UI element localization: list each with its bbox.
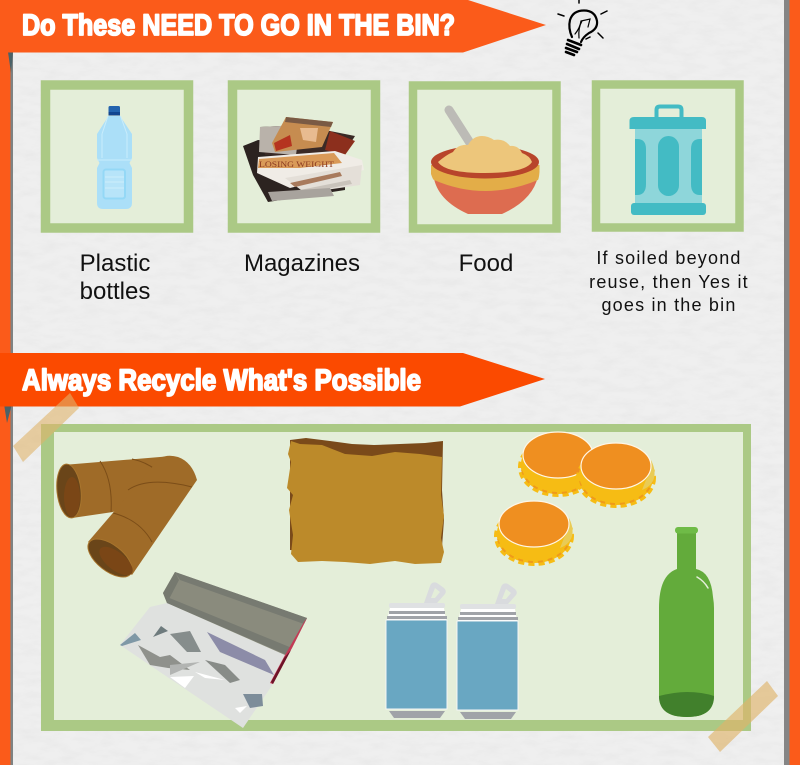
- left edge stripe: [0, 0, 13, 765]
- label: soiled items: reuse, then Yes it: [589, 272, 749, 292]
- tape: top left: [13, 393, 79, 462]
- icon: plastic bottle: [97, 106, 132, 209]
- panel: recyclables: [41, 424, 751, 731]
- panel: plastic bottles: [46, 85, 188, 305]
- panel: soiled items: [589, 84, 749, 315]
- icon: drink cans: [386, 582, 518, 719]
- label: magazines: Magazines: [244, 250, 360, 277]
- icon: magazine stack: [243, 117, 364, 202]
- panel: magazines: [232, 85, 376, 277]
- label: soiled items: goes in the bin: [601, 295, 737, 315]
- label: food: Food: [459, 250, 513, 277]
- icon: light bulb: [558, 0, 607, 55]
- panel: food: [413, 86, 556, 277]
- label: plastic bottles: Plastic: [80, 250, 150, 277]
- heading: always recycle: Always Recycle What's Possible: [22, 364, 421, 397]
- icon: magazine stack: LOSING WEIGHT: [259, 160, 334, 169]
- label: soiled items: If soiled beyond: [596, 248, 742, 268]
- banner: always recycle: [0, 353, 545, 406]
- right edge stripe: [784, 0, 800, 765]
- icon: bottle caps: [497, 432, 655, 563]
- icon: trash bin: [630, 106, 706, 215]
- banner: do these need to go in the bin: [0, 0, 546, 52]
- heading: bin question: Do These NEED TO GO IN THE BIN?: [22, 9, 455, 42]
- icon: green bottle: [659, 527, 714, 717]
- icon: torn cardboard: [287, 438, 444, 564]
- icon: cardboard tubes: [54, 456, 197, 584]
- icon: aluminium foil: [120, 572, 307, 728]
- icon: bowl of food: [431, 110, 540, 214]
- tape: bottom right: [708, 681, 778, 752]
- label: plastic bottles: bottles: [80, 278, 150, 305]
